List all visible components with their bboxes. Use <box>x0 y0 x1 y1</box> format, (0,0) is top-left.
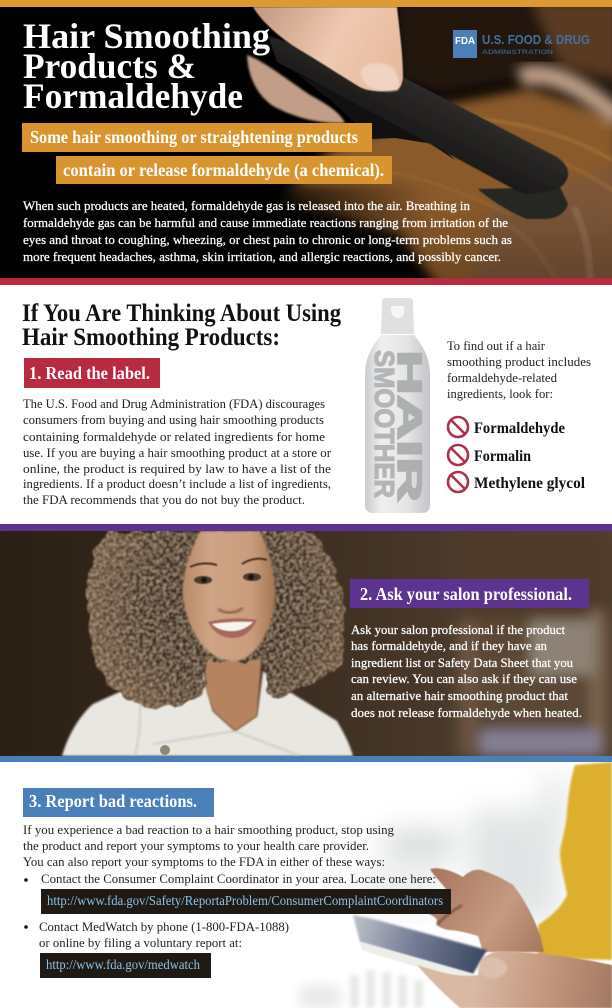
step 3 body text: You can also report your symptoms to the FDA in either of these ways: <box>23 854 385 869</box>
step 2 label <box>350 579 589 608</box>
callout: contain or release <box>56 156 392 184</box>
hero paragraph: When such products are heated, formaldehyde gas is released into the air. Breathing in <box>23 198 470 213</box>
ingredient lookup text: smoothing product includes <box>447 354 591 369</box>
ingredient lookup text: ingredients, look for: <box>447 386 553 401</box>
nose shadow <box>218 608 243 613</box>
main iron plate <box>268 36 568 194</box>
ingredient: formalin: Formalin <box>474 448 531 465</box>
purple divider <box>0 524 612 531</box>
step 2 body text: Ask your salon professional if the product <box>351 622 565 637</box>
hero photo: hand holding flat iron over hair <box>0 0 612 290</box>
step 2 body text: ingredient list or Safety Data Sheet that you <box>351 655 573 670</box>
photo: hands using smartphone <box>298 762 612 1008</box>
FDA logo <box>453 30 590 58</box>
bullet: MedWatch: Contact MedWatch by phone (1-800-FDA-1088) <box>39 919 289 934</box>
ingredient: formalin <box>448 445 531 465</box>
link box: coordinators URL: http://www.fda.gov/Safety/ReportaProblem/ConsumerComplaintCoordinators <box>47 893 443 908</box>
step 1 body text: the FDA recommends that you do not buy the product. <box>23 492 305 507</box>
smile <box>208 618 257 638</box>
agency name: U.S. FOOD & DRUG <box>482 32 590 47</box>
thumbnail <box>479 958 507 978</box>
logo square <box>453 30 477 58</box>
step 1 body text: containing formaldehyde or related ingredients for home <box>23 429 325 444</box>
ingredient: formaldehyde: Formaldehyde <box>474 420 565 437</box>
thumbnail <box>361 63 399 91</box>
icon: prohibition sign <box>448 417 468 437</box>
neck <box>204 658 262 732</box>
step 2 label: 2. Ask your salon professional. <box>360 584 572 604</box>
callout: some products: Some hair smoothing or straightening products <box>30 127 358 147</box>
hero paragraph: more frequent headaches, asthma, skin irritation, and allergic reactions, and possibly cancer. <box>23 249 501 264</box>
ingredient: formaldehyde <box>448 417 565 437</box>
hero paragraph: formaldehyde gas can be harmful and cause immediate reactions ranging from irritation of the <box>23 215 508 230</box>
title <box>23 16 270 116</box>
hero paragraph: eyes and throat to coughing, wheezing, or chest pain to chronic or long-term problems such as <box>23 232 512 247</box>
step 2 body text: can review. You can also ask if they can use <box>351 671 577 686</box>
step 1 body text: ingredients. If a product doesn’t include a list of ingredients, <box>23 476 331 491</box>
icon: prohibition sign <box>448 445 468 465</box>
bottle body <box>365 335 430 513</box>
link box: coordinators URL <box>41 889 451 914</box>
bullet: consumer complaint coordinator: Contact the Consumer Complaint Coordinator in your area. Locate one here: <box>41 871 436 886</box>
ingredient lookup text: To find out if a hair <box>447 338 546 353</box>
bottle cap <box>381 298 414 334</box>
step 1 label <box>24 358 160 388</box>
link box: MedWatch URL <box>40 953 211 978</box>
step 1 label: 1. Read the label. <box>29 363 150 383</box>
yellow sweater <box>538 762 612 960</box>
step 3 body text: If you experience a bad reaction to a hair smoothing product, stop using <box>23 822 394 837</box>
top orange bar <box>0 0 612 7</box>
logo initials: FDA <box>455 36 475 47</box>
ingredient lookup text <box>447 338 591 401</box>
title: Formaldehyde <box>23 76 243 116</box>
step 1 body text <box>23 396 332 507</box>
section heading: If You Are Thinking About Using <box>22 300 341 327</box>
hair <box>87 531 345 708</box>
step 2 body text: has formaldehyde, and if they have an <box>351 638 547 653</box>
step 1 body text: online, the product is required by law to have a list of the <box>23 461 331 476</box>
icon: prohibition sign <box>448 472 468 492</box>
section heading <box>22 300 341 351</box>
blue divider <box>0 756 612 762</box>
radiator <box>300 970 423 1008</box>
ingredient: methylene glycol <box>448 472 586 492</box>
administration: ADMINISTRATION <box>482 49 553 56</box>
jacket <box>62 671 353 756</box>
jacket button <box>160 745 170 755</box>
title: Products & <box>23 46 196 86</box>
phone <box>353 915 487 974</box>
step 3 label <box>23 788 214 817</box>
link box: MedWatch URL: http://www.fda.gov/medwatch <box>46 957 200 972</box>
step 3 label: 3. Report bad reactions. <box>29 791 197 811</box>
lower hand and thumb <box>417 951 612 1008</box>
bottle lettering: HAIR <box>390 350 428 502</box>
bottle illustration <box>365 298 430 513</box>
step 1 body text: consumers from buying and using hair smoothing products <box>23 412 324 427</box>
step 1 body text: The U.S. Food and Drug Administration (FDA) discourages <box>23 396 325 411</box>
photo: smiling woman in salon <box>0 531 612 756</box>
ingredient: methylene glycol: Methylene glycol <box>474 475 586 492</box>
step 2 body text: does not release formaldehyde when heated. <box>351 705 582 720</box>
step 1 body text: use. If you are buying a hair smoothing product at a store or <box>23 445 332 460</box>
section heading: Hair Smoothing Products: <box>22 324 280 351</box>
step 3 body text: the product and report your symptoms to your health care provider. <box>23 838 369 853</box>
upper hand <box>418 868 544 952</box>
lower fingers <box>247 55 345 123</box>
callout: contain or release: contain or release formaldehyde (a chemical). <box>63 160 384 180</box>
thumb <box>253 7 403 91</box>
step 2 body text: an alternative hair smoothing product that <box>351 688 568 703</box>
callout: some products <box>22 123 372 152</box>
eyes and brows <box>190 559 267 584</box>
face <box>183 531 275 661</box>
step 3 body text <box>23 822 394 869</box>
title: Hair Smoothing <box>23 16 270 56</box>
hero paragraph <box>23 198 512 264</box>
lower iron plate <box>297 74 455 160</box>
bottle illustration: SMOOTHER <box>369 350 400 498</box>
step 2 body text <box>351 622 582 720</box>
ingredient lookup text: formaldehyde-related <box>447 370 557 385</box>
bullet: MedWatch <box>24 919 289 950</box>
bullet: MedWatch: or online by filing a voluntary report at: <box>39 935 242 950</box>
red divider <box>0 278 612 285</box>
